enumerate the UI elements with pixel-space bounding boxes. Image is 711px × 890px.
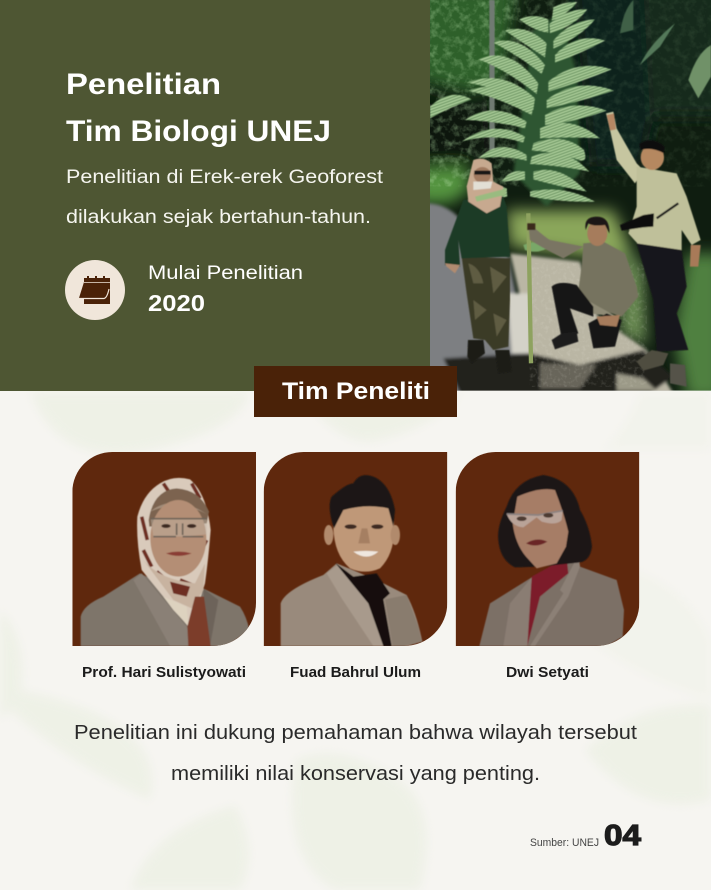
- person: woman in hijab: [445, 159, 512, 373]
- fern stem: [528, 213, 531, 363]
- intro text: [66, 167, 384, 228]
- start date: Mulai Penelitian: [148, 263, 303, 284]
- title: Tim Biologi UNEJ: [66, 115, 331, 148]
- start date: 2020: [148, 290, 205, 316]
- source credit and page number: Sumber: UNEJ: [530, 837, 599, 849]
- title: Penelitian: [66, 68, 221, 101]
- closing statement: [74, 722, 637, 785]
- source credit and page number: 04: [604, 820, 641, 852]
- icon: calendar badge: [65, 260, 125, 320]
- portrait card: Prof. Hari Sulistyowati: [72, 452, 256, 646]
- name labels: Fuad Bahrul Ulum: [290, 664, 421, 681]
- portrait card: Fuad Bahrul Ulum: [264, 452, 447, 646]
- person: man raising arm with camera: [606, 112, 701, 387]
- name labels: Dwi Setyati: [506, 664, 589, 681]
- background: pale leaf texture: [0, 385, 711, 890]
- title: [66, 68, 331, 148]
- heading tab: Tim Peneliti: Tim Peneliti: [282, 378, 430, 405]
- closing statement: Penelitian ini dukung pemahaman bahwa wilayah tersebut: [74, 722, 637, 744]
- closing statement: memiliki nilai konservasi yang penting.: [171, 763, 540, 785]
- name labels: [82, 664, 589, 681]
- intro text: Penelitian di Erek-erek Geoforest: [66, 167, 384, 188]
- start date: [148, 263, 303, 316]
- panel: green header: [0, 0, 430, 391]
- fern: [430, 2, 614, 252]
- pole: [489, 0, 495, 150]
- heading tab: Tim Peneliti: [254, 366, 457, 417]
- person: kneeling man: [527, 217, 638, 349]
- source credit and page number: [530, 820, 641, 852]
- portrait card: Dwi Setyati: [456, 452, 639, 646]
- intro text: dilakukan sejak bertahun-tahun.: [66, 207, 371, 228]
- photo: researchers with giant fern: [417, 0, 711, 400]
- name labels: Prof. Hari Sulistyowati: [82, 664, 246, 681]
